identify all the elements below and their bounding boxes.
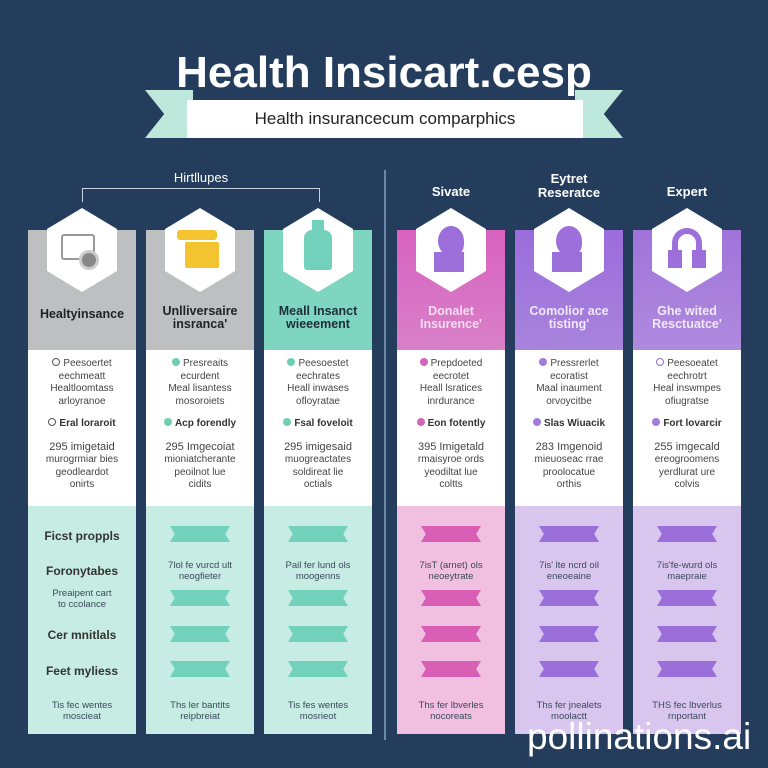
panel: column 1: Foronytabes	[46, 564, 118, 578]
panel: column 2: mosoroiets Acp forendly 295 Imgecoiat	[165, 396, 236, 452]
panel: column 1: to ccolance	[58, 599, 106, 610]
watermark: pollinations.ai	[527, 716, 751, 757]
panel: column 2: Presreaits	[183, 358, 228, 369]
panel: column 4: nocoreats	[430, 711, 472, 722]
panel: column 5: Maal inaument	[536, 383, 602, 394]
panel: column 1: eechmeatt	[59, 370, 105, 382]
panel: column 3: moogenns	[296, 571, 340, 582]
panel: column 2: 7lol fe vurcd ult	[168, 560, 232, 571]
panel: column 5: moolactt	[551, 711, 587, 722]
icon: document	[47, 208, 117, 292]
panel: column 6: eechrotrt	[667, 370, 707, 382]
panel: column 1: Peesoertet	[63, 358, 112, 369]
subtitle ribbon: Health insurancecum comparphics	[255, 109, 515, 128]
icon: head	[416, 208, 486, 292]
panel: column 4: Heall lsratices	[420, 383, 482, 394]
panel: column 5: 7is' lte ncrd oil	[539, 560, 599, 571]
panel: column 3: Pail fer lund ols	[286, 560, 350, 571]
panel: column 1: Ficst proppls	[44, 529, 120, 543]
panel: column 2: cidits	[189, 479, 211, 490]
icon: card	[165, 208, 235, 292]
panel: column 4: Insurence'	[420, 317, 482, 331]
panel: column 3: wieeement	[286, 317, 350, 331]
panel: column 5: Comolior ace	[529, 304, 609, 318]
panel: column 3: ofloyratae Fsal foveloit 295 imigesaid	[284, 396, 353, 452]
panel: column 3: Heall inwases	[287, 383, 349, 394]
panel: column 3	[264, 208, 372, 734]
right headings: Sivate	[432, 184, 470, 199]
panel: column 2: Ths ler bantits	[170, 700, 230, 711]
panel: column 4: yeodiltat lue	[424, 466, 478, 478]
panel: column 2: reipbreiat	[180, 711, 220, 722]
text: Reseratce	[538, 185, 600, 200]
panel: column 6: yerdlurat ure	[659, 466, 715, 478]
panel: column 3: Meall Insanct	[279, 304, 357, 318]
panel: column 3: mosrieot	[300, 711, 336, 722]
icon: lock	[652, 208, 722, 292]
panel: column 4: inrdurance Eon fotently 395 Imigetald	[418, 396, 485, 452]
text: Eytret	[551, 171, 587, 186]
panel: column 3: eechrates	[296, 370, 340, 382]
panel: column 2: mioniatcherante	[164, 454, 236, 465]
panel: column 6: 7is'fe-wurd ols	[657, 560, 717, 571]
title: Health Insicart.cesp	[176, 48, 592, 97]
panel: column 4: Prepdoeted	[431, 358, 482, 369]
bracket heading: Hirtllupes	[174, 170, 228, 185]
panel: column 3: muogreactates	[285, 454, 351, 465]
panel: column 1: Eral loraroit 295 imigetaid	[49, 418, 116, 452]
panel: column 4	[397, 208, 505, 734]
panel: column 6: maepraie	[667, 571, 707, 582]
panel: column 3: octials	[304, 479, 332, 490]
panel: column 6: ereogroomens	[655, 454, 719, 465]
panel: column 4: coltts	[439, 479, 463, 490]
panel: column 4: 7isT (arnet) ols	[419, 560, 483, 571]
panel: column 5	[515, 208, 623, 734]
panel: column 3: soldireat lie	[293, 466, 343, 478]
panel: column 1: murogrmiar bies	[46, 454, 118, 465]
panel: column 2: peoilnot lue	[174, 466, 226, 478]
panel: column 5: orvoycitbe Slas Wiuacik 283 Imgenoid	[536, 396, 605, 452]
panel: column 1: Cer mnitlals	[48, 628, 116, 642]
panel: column 4: eecrotet	[433, 370, 469, 382]
panel: column 1: geodleardot	[56, 466, 108, 478]
panel: column 5: Pressrerlet	[550, 358, 599, 369]
panel: column 2: insranca'	[173, 317, 227, 331]
panel: column 1: Healtyinsance	[40, 307, 124, 321]
panel: column 6: Peesoeatet	[667, 358, 718, 369]
panel: column 1: Tis fec wentes	[52, 700, 112, 711]
panel: column 2: neogfieter	[179, 571, 221, 582]
panel: column 1	[28, 208, 136, 734]
panel: column 2	[146, 208, 254, 734]
panel: column 5: ecoratist	[550, 370, 588, 382]
panel: column 6	[633, 208, 741, 734]
panel: column 6: colvis	[674, 479, 700, 490]
icon: bottle	[283, 208, 353, 292]
icon: head	[534, 208, 604, 292]
panel: column 1: Preaipent cart	[52, 588, 112, 599]
panel: column 3: Peesoestet	[298, 358, 349, 369]
panel: column 6: ofiugratse Fort lovarcir 255 imgecald	[654, 396, 722, 452]
panel: column 4: rmaisyroe ords	[418, 454, 484, 465]
panel: column 5: mieuoseac rrae	[535, 454, 603, 465]
subtitle ribbon	[145, 90, 623, 138]
panel: column 6: THS fec lbverlus	[652, 700, 722, 711]
panel: column 6: rnportant	[668, 711, 706, 722]
panel: column 5: orthis	[557, 479, 581, 490]
panel: column 6: Resctuatce'	[652, 317, 722, 331]
panel: column 6: Heal inswmpes	[653, 383, 721, 394]
panel: column 5: proolocatue	[543, 466, 595, 478]
panel: column 5: tisting'	[549, 317, 589, 331]
panel: column 2: Meal lisantess	[168, 383, 232, 394]
panel: column 5: eneoeaine	[547, 571, 591, 582]
panel: column 1: Feet myliess	[46, 664, 118, 678]
panel: column 4: Ths fer lbverles	[419, 700, 483, 711]
panel: column 6: Ghe wited	[657, 304, 717, 318]
panel: column 1: moscieat	[63, 711, 101, 722]
panel: column 1: onirts	[70, 479, 94, 490]
panel: column 2: ecurdent	[181, 370, 219, 382]
text: Expert	[667, 184, 707, 199]
panel: column 1: arloyranoe	[58, 396, 106, 406]
panel: column 4: Donalet	[428, 304, 474, 318]
bracket heading	[82, 170, 320, 202]
panel: column 4: neoeytrate	[429, 571, 473, 582]
panel: column 5: Ths fer jnealets	[537, 700, 601, 711]
panel: column 1: Healtloomtass	[50, 383, 114, 394]
panel: column 3: Tis fes wentes	[288, 700, 348, 711]
panel: column 2: Unlliversaire	[162, 304, 238, 318]
